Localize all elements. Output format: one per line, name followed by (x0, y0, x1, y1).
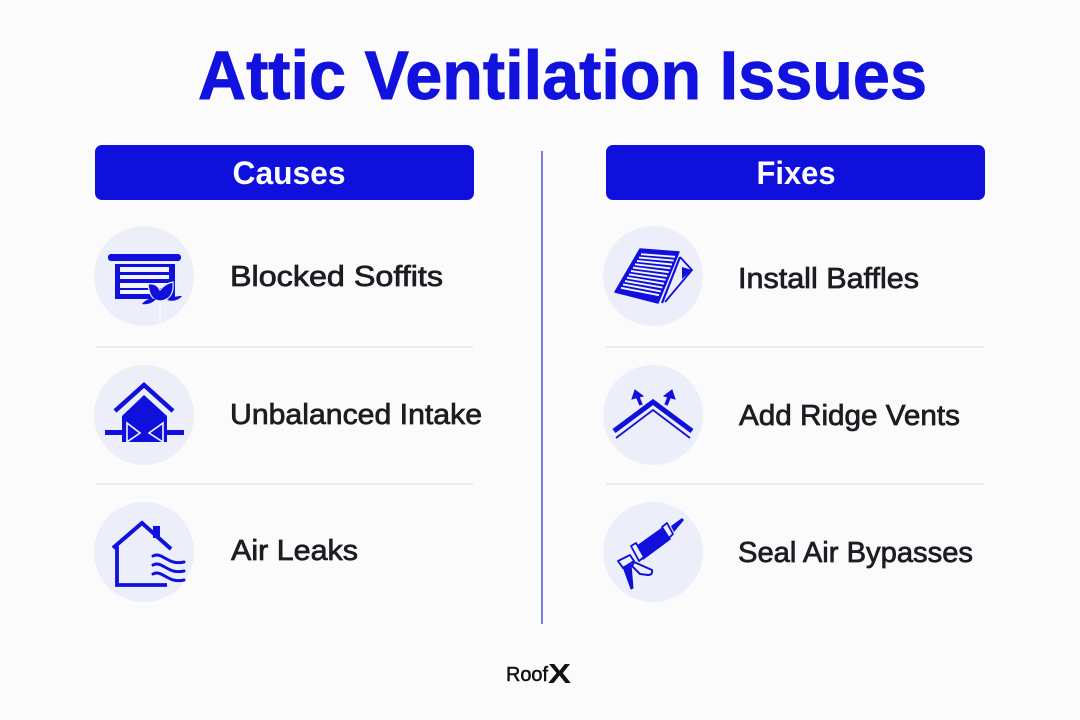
label: add ridge vents: Add Ridge Vents (739, 400, 960, 432)
title: Attic Ventilation Issues (198, 37, 927, 114)
heading: causes (95, 145, 474, 200)
panel: causes (94, 145, 482, 602)
label: blocked soffits: Blocked Soffits (230, 261, 443, 293)
logo: RoofX: X (548, 658, 571, 689)
label: install baffles: Install Baffles (738, 263, 919, 295)
label: unbalanced intake: Unbalanced Intake (230, 399, 482, 431)
icon: unbalanced intake (94, 365, 194, 465)
panel: fixes (603, 145, 985, 602)
heading: causes: Causes (232, 155, 346, 191)
icon: blocked soffit (94, 226, 194, 327)
icon: caulk gun (603, 502, 703, 602)
heading: fixes (606, 145, 985, 200)
icon: ridge vents (603, 365, 703, 465)
icon: baffles (603, 226, 703, 326)
heading: fixes: Fixes (756, 155, 836, 191)
logo: RoofX: Roof (506, 664, 548, 686)
logo: RoofX (506, 658, 571, 689)
label: air leaks: Air Leaks (231, 535, 358, 567)
center divider (541, 151, 543, 624)
label: seal air bypasses: Seal Air Bypasses (738, 537, 973, 569)
icon: air leaks (94, 502, 194, 602)
